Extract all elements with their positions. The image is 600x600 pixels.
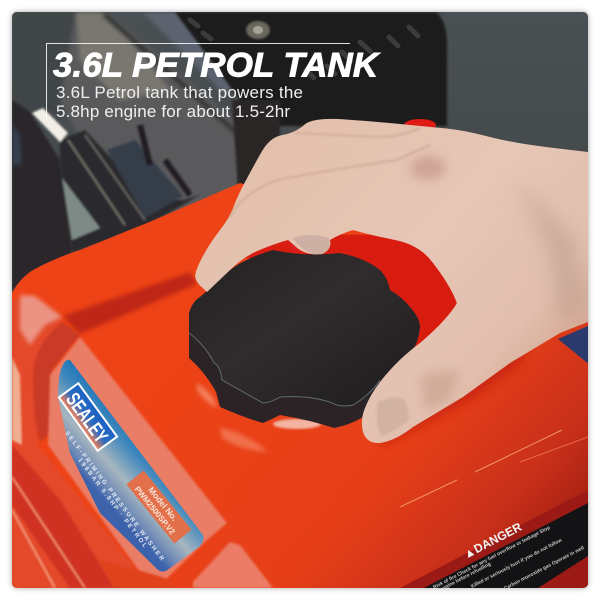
danger sticker [400,490,588,593]
danger sticker: Killed or seriously hurt if you do not follow [470,537,563,590]
cap top surface [189,250,420,406]
blue decal edge [558,326,588,364]
small red part above hand [404,119,436,128]
knuckle redness [410,156,446,180]
danger sticker: Risk of fire Check for any fuel overflow or leakage Stop [432,525,551,591]
heading: 3.6L PETROL TANK [53,46,381,84]
danger sticker: Carbon monoxide gas Operate in well [503,545,586,592]
curled fingertip [293,235,330,254]
red petrol tank [12,183,588,588]
model number box [127,471,191,543]
back of hand shading [526,200,585,316]
cap white inlet [273,419,321,429]
recess lower pink block [193,542,273,588]
engine dark block [175,12,447,190]
cap rim highlight [189,333,380,406]
model number box: PWM2500SP.V2 [133,485,177,537]
danger sticker: engine before refuelling [439,561,492,593]
thumb shading [420,370,460,410]
product description: SELF-PRIMING PRESSURE WASHER [63,431,165,563]
grey wall background [12,12,588,144]
chrome frame pipes [32,108,200,252]
danger sticker: ▲DANGER [461,520,524,562]
red fuel inlet peek [289,241,301,252]
cap side wall [189,334,386,428]
finger creases [230,128,430,217]
fuel cap [189,250,420,429]
left machine background [12,12,240,225]
thumbnail [377,398,409,436]
tank red band under rim [63,272,197,334]
description text: 3.6L Petrol tank that powers the [56,83,303,102]
left black container [12,100,72,290]
SEALEY product label: 196BAR 5.8HP · PETROL [76,458,148,549]
tank surface reflections [197,383,588,507]
title block [46,44,381,121]
description text: 5.8hp engine for about 1.5-2hr [56,102,290,121]
logo badge: SEALEY [61,389,112,448]
tank corner bevel [12,292,134,588]
hand [195,119,588,443]
hole recess behind cap [244,234,456,347]
title frame lines [46,44,350,118]
shadow around thumb [380,354,526,446]
label recess [48,337,227,580]
model number box: Model No. [146,485,180,523]
logo badge [57,382,119,452]
SEALEY product label [57,360,204,572]
